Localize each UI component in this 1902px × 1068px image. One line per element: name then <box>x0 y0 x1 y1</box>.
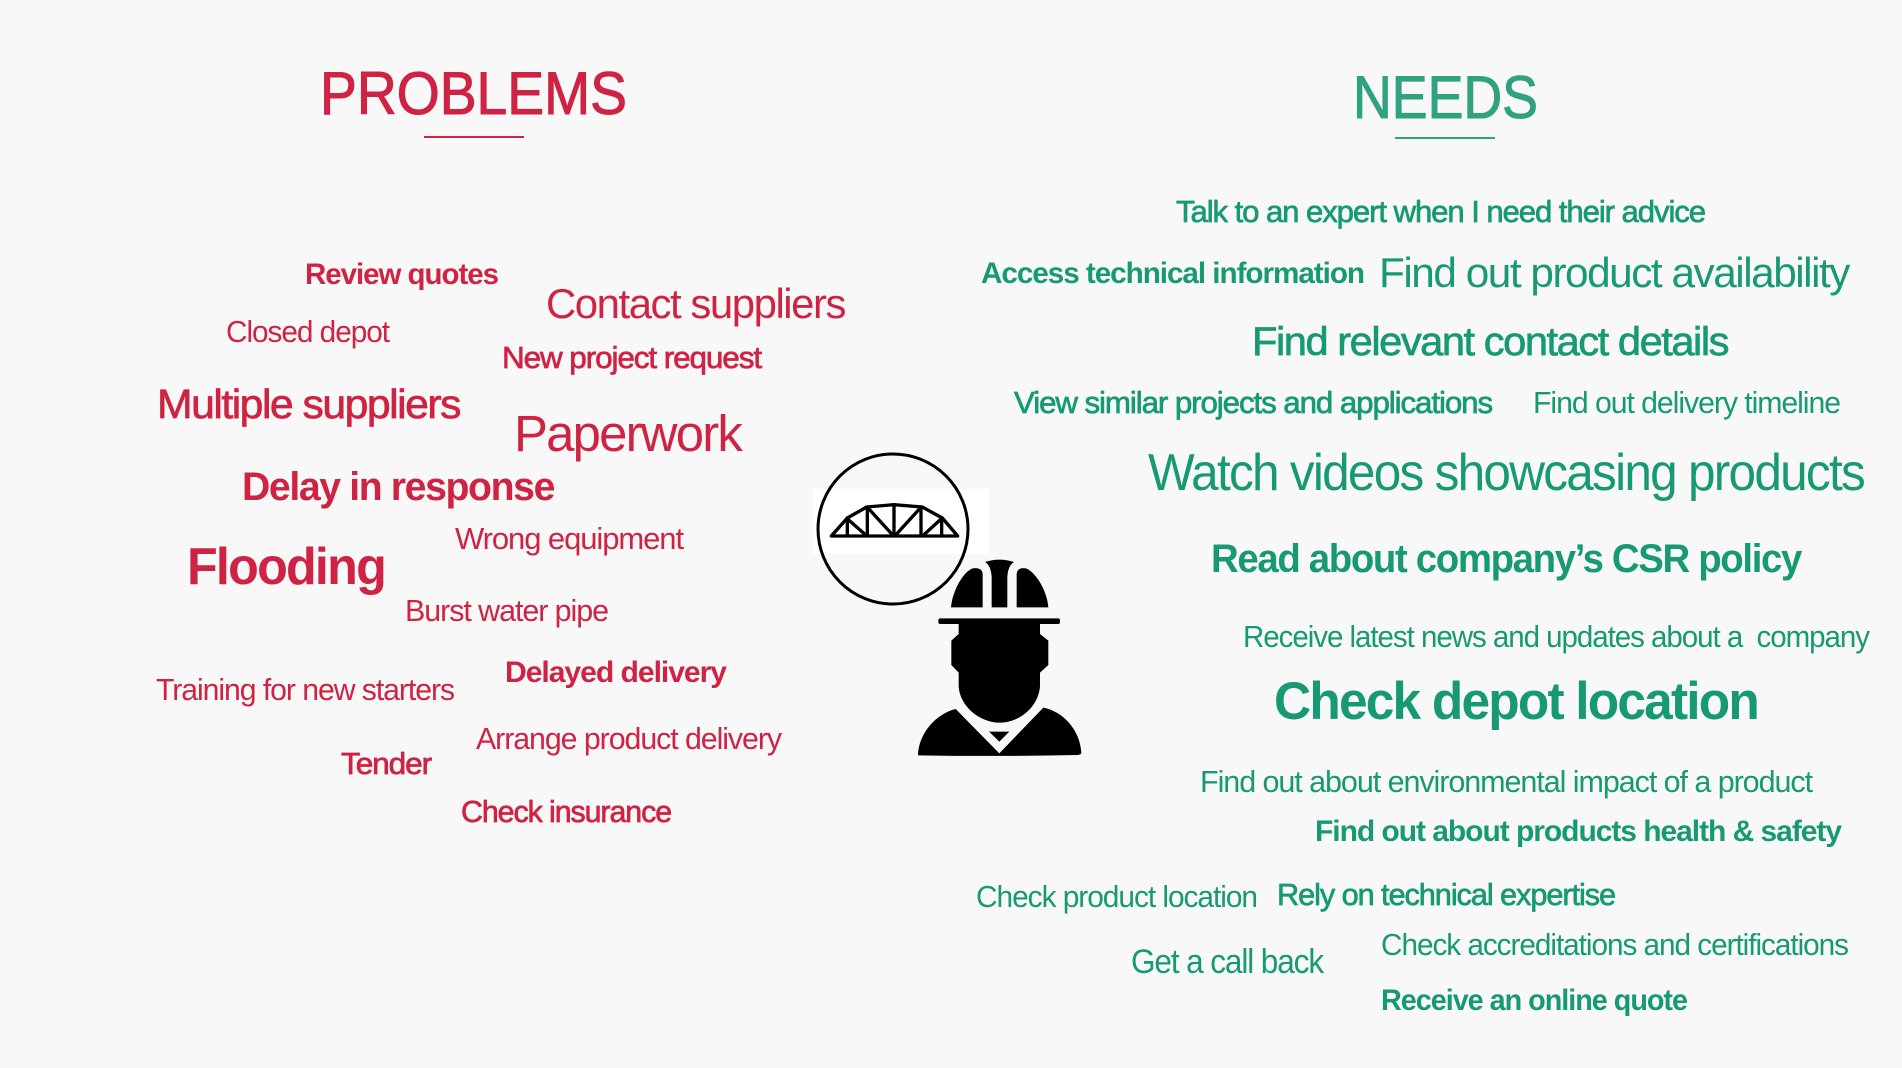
need: environmental impact: Find out about environmental impact of a product <box>1200 764 1813 799</box>
problem: tender: Tender <box>341 746 432 781</box>
need: find out delivery timeline: Find out delivery timeline <box>1533 385 1840 420</box>
need: get a call back: Get a call back <box>1131 943 1325 981</box>
icon: bridge in thought bubble <box>813 454 989 604</box>
need: find relevant contact details: Find relevant contact details <box>1252 320 1728 364</box>
problem: contact suppliers: Contact suppliers <box>546 280 845 327</box>
heading: problems: PROBLEMS <box>320 60 627 127</box>
need: check depot location: Check depot location <box>1274 672 1758 731</box>
problem: arrange product delivery: Arrange product delivery <box>476 721 783 756</box>
problem: review quotes: Review quotes <box>305 258 498 291</box>
problem: new project request: New project request <box>502 340 762 375</box>
heading: needs: NEEDS <box>1353 64 1538 131</box>
problem: multiple suppliers: Multiple suppliers <box>157 381 461 427</box>
need: rely on technical expertise: Rely on technical expertise <box>1277 877 1615 912</box>
problem: wrong equipment: Wrong equipment <box>455 521 684 556</box>
icon: worker thinking of a bridge <box>813 454 1081 756</box>
problem: closed depot: Closed depot <box>226 314 390 349</box>
problem: paperwork: Paperwork <box>514 405 743 462</box>
need: health and safety: Find out about products health & safety <box>1315 815 1842 848</box>
need: read about csr policy: Read about company’s CSR policy <box>1211 537 1803 581</box>
problem: training for new starters: Training for new starters <box>156 672 455 707</box>
need: view similar projects: View similar projects and applications <box>1014 385 1493 420</box>
panel: problems <box>156 60 845 829</box>
need: talk to an expert: Talk to an expert when I need their advice <box>1176 194 1705 229</box>
need: watch videos: Watch videos showcasing products <box>1148 444 1865 502</box>
need: check accreditations: Check accreditations and certifications <box>1381 927 1849 962</box>
need: access technical information: Access technical information <box>981 257 1364 290</box>
need: check product location: Check product location <box>976 879 1257 914</box>
problem: burst water pipe: Burst water pipe <box>405 593 608 628</box>
problem: delay in response: Delay in response <box>242 465 554 509</box>
problem: check insurance: Check insurance <box>461 794 671 829</box>
need: find out product availability: Find out product availability <box>1379 249 1850 296</box>
problem: flooding: Flooding <box>187 538 385 596</box>
need: receive an online quote: Receive an online quote <box>1381 984 1687 1017</box>
problem: delayed delivery: Delayed delivery <box>505 656 727 689</box>
need: receive latest news: Receive latest news and updates about a company <box>1243 619 1870 654</box>
panel: needs <box>976 64 1870 1017</box>
icon: construction worker <box>918 560 1081 756</box>
